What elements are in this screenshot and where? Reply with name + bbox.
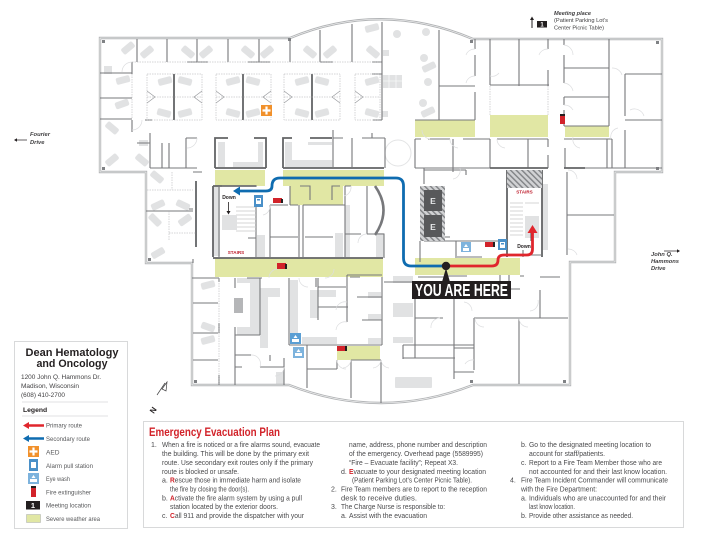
- heading: plan title: Emergency Evacuation Plan: [149, 427, 280, 439]
- legend: severe weather area: Severe weather area: [46, 516, 100, 523]
- text: column two: [331, 442, 487, 520]
- legend: fire extinguisher: Fire extinguisher: [46, 490, 92, 496]
- legend: alarm pull station: [29, 459, 93, 471]
- legend: fire extinguisher: [31, 486, 92, 497]
- legend: severe weather area: [26, 514, 100, 523]
- text: column three: b.: [521, 442, 527, 449]
- text: column one: the fire by closing the door(s).: [170, 486, 249, 494]
- label: John Q. Hammons Drive: Hammons: [651, 259, 680, 265]
- text: address: (608) 410-2700: [21, 392, 65, 399]
- legend: eye wash: [28, 473, 70, 484]
- exterior walls: [100, 19, 662, 403]
- legend: alarm pull station: Alarm pull station: [46, 463, 93, 470]
- text: column three: account for staff/patients.: [529, 451, 605, 458]
- text: column three: c.: [521, 460, 526, 467]
- text: column two: a.: [341, 513, 347, 520]
- text: column one: the building. This will be done by the primary exit: [162, 451, 309, 458]
- primary route: [446, 225, 538, 266]
- label: Fourier Drive: Drive: [30, 140, 45, 146]
- legend: AED: [28, 446, 60, 457]
- legend: secondary route: Secondary route: [46, 436, 90, 443]
- icon: AED: [261, 105, 272, 116]
- text: column three: a.: [521, 496, 527, 502]
- north arrow: [148, 382, 167, 415]
- label: meeting place: 1: [540, 22, 544, 28]
- label: meeting place: Center Picnic Table): [554, 26, 604, 32]
- text: column three: Fire Team Incident Commander will communicate: [521, 478, 668, 484]
- text: column one: route is blocked or unsafe.: [162, 469, 239, 476]
- text: column three: Individuals who are unaccounted for and their: [529, 496, 667, 502]
- elevators: [420, 186, 445, 241]
- heading: legend: Legend: [23, 407, 47, 414]
- text: column two: Evacuate to your designated meeting location: [349, 469, 486, 476]
- secondary route: [233, 178, 446, 266]
- text: column one: Activate the fire alarm system by using a pull: [170, 496, 302, 502]
- right stairwell: Down: [517, 244, 531, 250]
- label: meeting place: Meeting place: [554, 11, 591, 17]
- panel: emergency evacuation plan: [144, 422, 684, 528]
- legend: meeting location: Meeting location: [46, 502, 91, 510]
- doors: [122, 45, 644, 376]
- text: column three: last know location.: [529, 504, 575, 511]
- label: John Q. Hammons Drive: John Q.: [651, 252, 673, 258]
- text: column three: Report to a Fire Team Member those who are: [529, 460, 662, 467]
- text: column two: of the emergency. Overhead page (5589995): [349, 451, 483, 458]
- left stairwell: [222, 195, 256, 255]
- legend: secondary route: [23, 435, 90, 443]
- legend: meeting location: 1: [31, 501, 35, 510]
- you are here marker: [412, 262, 511, 300]
- left stairwell: Down: [222, 195, 236, 201]
- text: column three: not accounted for and their last know location.: [529, 469, 667, 476]
- right stairwell: STAIRS: [516, 190, 533, 194]
- text: column two: d.: [341, 469, 347, 476]
- text: column two: desk to receive duties.: [341, 496, 417, 502]
- legend: eye wash: Eye wash: [46, 476, 70, 483]
- text: column two: 3.: [331, 504, 337, 511]
- label: Fourier Drive: Fourier: [30, 132, 51, 138]
- text: address: 1200 John Q. Hammons Dr.: [21, 374, 101, 381]
- text: address: [21, 374, 101, 399]
- label: John Q. Hammons Drive: Drive: [651, 266, 666, 272]
- label: meeting place: (Patient Parking Lot’s: [554, 18, 608, 24]
- severe weather areas: [215, 115, 609, 360]
- heading: organisation name: and Oncology: [36, 358, 108, 370]
- elevators: E: [430, 196, 436, 206]
- text: column three: b.: [521, 513, 527, 520]
- elevators: E: [430, 222, 436, 232]
- text: column one: c.: [162, 513, 168, 520]
- label: John Q. Hammons Drive: [651, 249, 680, 272]
- text: column three: Provide other assistance as needed.: [529, 513, 633, 520]
- text: column two: Assist with the evacuation: [349, 513, 427, 520]
- icons: fire extinguishers: [273, 114, 565, 351]
- interior walls: [100, 22, 662, 403]
- text: column one: When a fire is noticed or a fire alarms sound, evacuate: [162, 442, 320, 449]
- floor plan: [100, 19, 662, 403]
- furniture: [104, 23, 548, 388]
- legend: meeting location: [26, 501, 91, 510]
- text: column one: Call 911 and provide the dispatcher with your: [170, 513, 305, 520]
- legend: AED: AED: [46, 450, 60, 456]
- icons: eye wash: [290, 242, 471, 358]
- legend: primary route: Primary route: [46, 422, 82, 430]
- label: meeting place: [530, 11, 608, 32]
- heading: organisation name: [26, 347, 119, 370]
- you are here marker: YOU ARE HERE: [415, 280, 508, 300]
- text: column three: with the Fire Department:: [520, 486, 597, 494]
- text: column two: 2.: [331, 486, 337, 494]
- text: column three: [510, 442, 668, 520]
- text: column two: (Patient Parking Lot’s Center Picnic Table).: [352, 478, 472, 484]
- text: column one: route. Use secondary exit routes only if the primary: [162, 460, 313, 467]
- icons: alarm pull stations: [254, 195, 507, 250]
- text: column one: station located by the exterior doors.: [170, 504, 278, 511]
- right stairwell: [507, 170, 542, 250]
- text: column two: name, address, phone number and description: [349, 442, 487, 449]
- text: column two: “Fire – Evacuate facility”; Repeat X3.: [349, 460, 458, 467]
- heading: organisation name: Dean Hematology: [26, 347, 119, 359]
- text: column three: 4.: [510, 478, 516, 484]
- text: column two: The Charge Nurse is responsible to:: [341, 504, 445, 511]
- text: column one: Rescue those in immediate harm and isolate: [170, 478, 301, 484]
- text: column three: Go to the designated meeting location to: [529, 442, 651, 449]
- north arrow: N: [148, 405, 159, 415]
- text: column one: a.: [162, 478, 168, 484]
- panel: legend: [14, 342, 128, 528]
- text: column one: b.: [162, 496, 168, 502]
- text: column two: Fire Team members are to report to the reception: [341, 486, 487, 494]
- label: Fourier Drive: [14, 132, 51, 146]
- text: column one: [151, 442, 320, 520]
- text: address: Madison, Wisconsin: [21, 383, 79, 390]
- text: column one: 1.: [151, 442, 157, 449]
- left stairwell: STAIRS: [228, 250, 244, 255]
- legend: primary route: [23, 422, 82, 430]
